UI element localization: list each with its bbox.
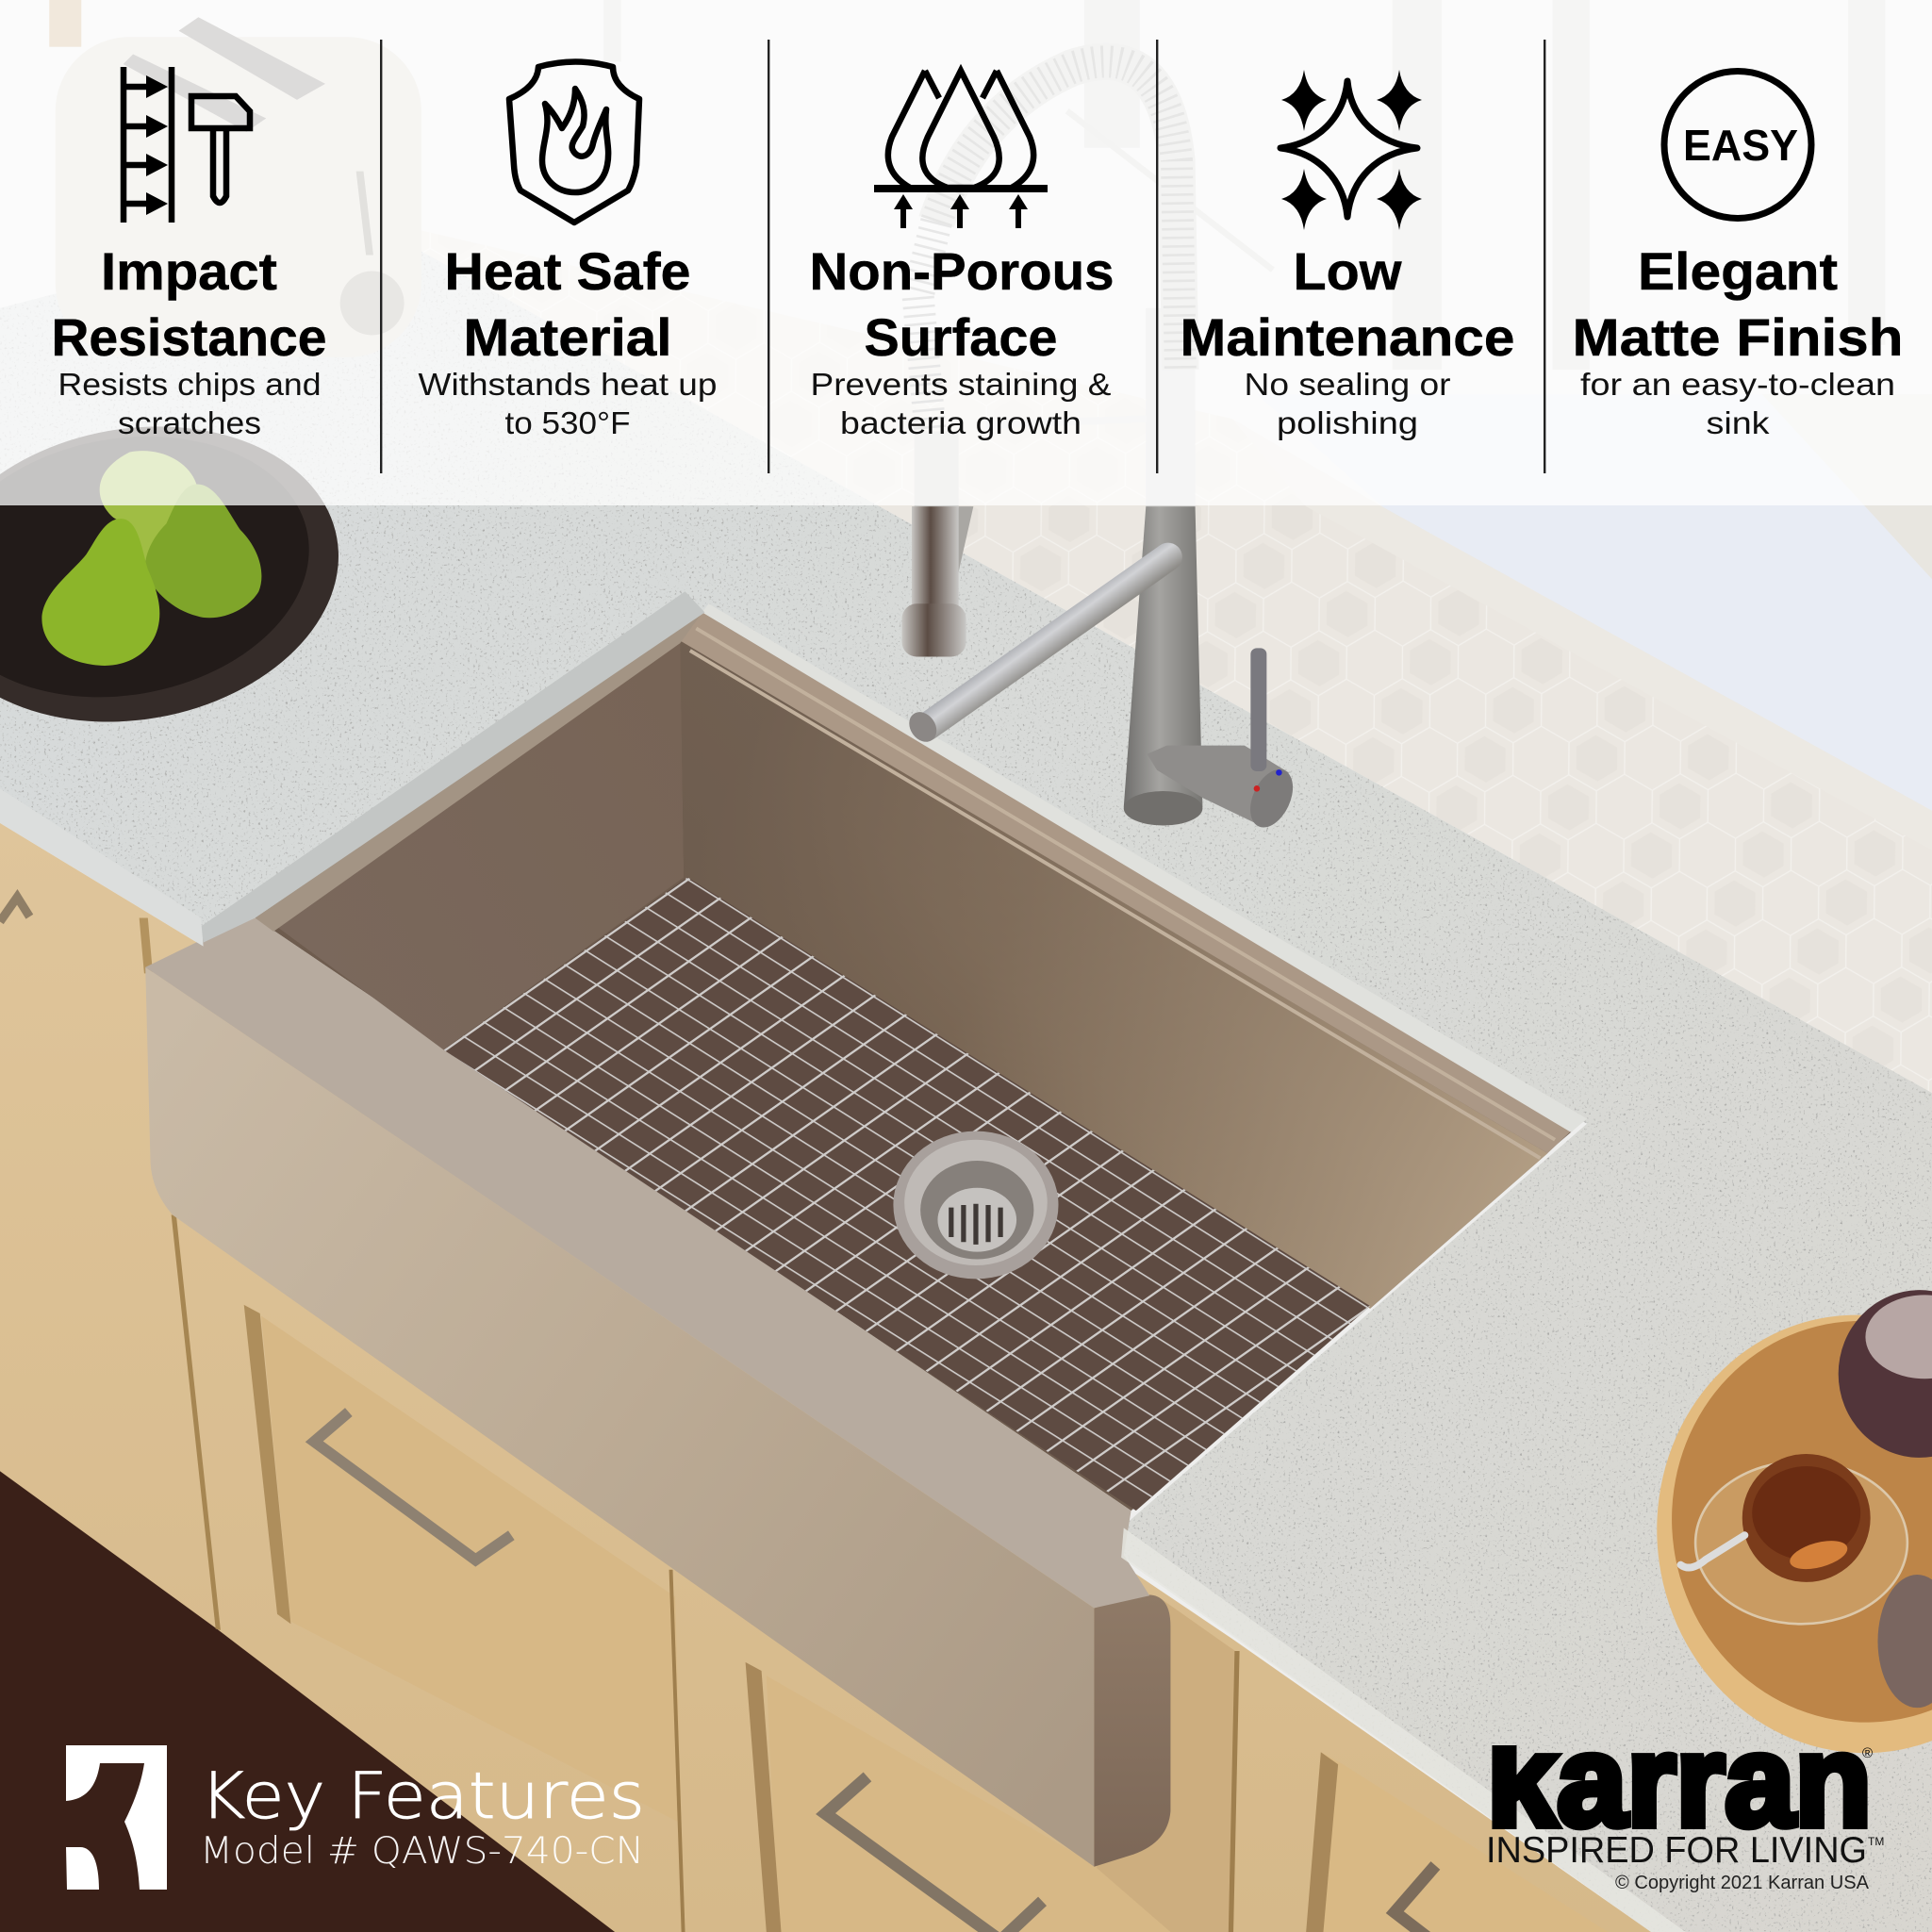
logo mark: white R: [66, 1745, 167, 1890]
stepped rim, left: [255, 612, 702, 932]
wire grid: [443, 877, 1370, 1511]
toaster: [49, 0, 421, 357]
upper faucet under the panel: [915, 308, 1196, 506]
left door edge, upper: [140, 918, 153, 973]
heading: Low: [1294, 241, 1402, 301]
description: [419, 368, 717, 441]
shaded wood beside the sink: [1097, 1597, 1237, 1932]
apron front: [145, 967, 1094, 1867]
description: Prevents staining &: [811, 368, 1111, 403]
sink left wall: [273, 643, 684, 1049]
model number: Model # QAWS-740-CN: [200, 1830, 644, 1873]
description: [1245, 368, 1450, 441]
handle: drawer two: [826, 1776, 1043, 1932]
front edge of the right counter: [1121, 1527, 1686, 1932]
sink base: [255, 612, 1572, 1511]
window diagonal mullion: [1067, 111, 1273, 270]
backsplash top band: [1232, 419, 1932, 850]
icon: water drops on surface: [874, 71, 1048, 228]
wordmark: karran: [1487, 1709, 1872, 1854]
left door edge, lower: [172, 1214, 221, 1630]
feature: low maintenance: [1181, 70, 1514, 441]
heading: Matte Finish: [1573, 307, 1903, 367]
heading: Surface: [864, 307, 1058, 367]
cabinets: [0, 823, 1651, 1932]
spoon: [1680, 1535, 1744, 1568]
stepped rim, rear: [680, 612, 1571, 1153]
floor: [0, 1471, 615, 1932]
teacup: [1742, 1454, 1871, 1582]
right centre door groove: [746, 1662, 781, 1932]
door split line: [669, 1570, 685, 1932]
lever housing: [1148, 746, 1289, 827]
apron top rim: [145, 918, 1149, 1608]
divider three: [1156, 40, 1158, 473]
drain: [893, 1131, 1059, 1279]
cabinet line right of the sink: [1229, 1651, 1240, 1932]
heading: Resistance: [51, 307, 326, 367]
front edge of the left counter: [0, 788, 204, 947]
handle: drawer three: [1395, 1865, 1435, 1932]
small pot: [1878, 1575, 1932, 1708]
sink rear wall: [680, 641, 1547, 1309]
window frame bars: [603, 0, 1885, 370]
plate with pears: [0, 395, 362, 753]
copyright: © Copyright 2021 Karran USA: [1615, 1873, 1870, 1893]
title: key features: Key Features: [200, 1759, 645, 1834]
description: for an easy-to-clean: [1580, 368, 1895, 403]
heading: [445, 241, 690, 367]
faucet stem: [1124, 506, 1202, 807]
feature: non-porous surface: [809, 71, 1115, 441]
hot and cold dots: [1254, 769, 1282, 792]
description: [811, 368, 1111, 441]
description: No sealing or: [1245, 368, 1450, 403]
registered mark: ®: [1862, 1745, 1873, 1761]
counter cut edge, left: [201, 591, 704, 943]
centre door groove: [244, 1305, 290, 1624]
description: Resists chips and: [58, 368, 321, 403]
heading: [1181, 241, 1514, 367]
heading: [809, 241, 1115, 367]
feature: impact resistance: [51, 67, 326, 441]
window sill: [1257, 394, 1932, 811]
icon: easy badge: EASY: [1683, 121, 1798, 170]
spout arm: [927, 557, 1168, 727]
description: scratches: [118, 406, 261, 441]
counter cut edge, rear: [702, 603, 1587, 1132]
sink: [145, 612, 1572, 1867]
sprayer body: [902, 506, 973, 657]
faucet: [902, 61, 1301, 834]
icon: wall and hammer: [124, 67, 250, 223]
heading: Elegant: [1638, 241, 1838, 301]
icon: sparkle: [1280, 70, 1422, 230]
brand logo: karran: [1490, 1745, 1884, 1892]
cabinet base wood: [0, 823, 1651, 1932]
hexagon tile backsplash: [357, 216, 1932, 1093]
description: Withstands heat up: [419, 368, 717, 403]
divider one: [380, 40, 382, 473]
centre door panel: [261, 1316, 682, 1824]
icon: easy badge: [1664, 72, 1811, 219]
teapot: [1839, 1290, 1932, 1458]
heading: Maintenance: [1181, 307, 1514, 367]
heading: [51, 241, 326, 367]
handle: left upper: [0, 897, 29, 921]
description: sink: [1707, 406, 1770, 441]
tagline: INSPIRED FOR LIVING: [1486, 1830, 1867, 1871]
apron side: [1094, 1594, 1170, 1867]
pears: [41, 451, 261, 666]
lever: [1250, 648, 1266, 771]
heading: Non-Porous: [809, 241, 1115, 301]
description: [58, 368, 321, 441]
right door groove: [1306, 1752, 1338, 1932]
sink floor: [443, 877, 1370, 1511]
serving tray with teaware: [1628, 1289, 1932, 1779]
divider four: [1544, 40, 1545, 473]
saucer: [1695, 1461, 1907, 1624]
frosted feature panel: [0, 0, 1932, 505]
spring hose: [936, 61, 1181, 370]
right centre door panel: [767, 1676, 1214, 1932]
description: [1580, 368, 1895, 441]
heading: [1573, 241, 1903, 367]
feature: heat safe material: [419, 62, 717, 441]
heading: Material: [464, 307, 671, 367]
description: bacteria growth: [840, 406, 1082, 441]
heading: Heat Safe: [445, 241, 690, 301]
handle: drawer one: [314, 1412, 511, 1560]
trademark: TM: [1868, 1835, 1884, 1848]
description: to 530°F: [505, 406, 630, 441]
right door panel: [1306, 1752, 1608, 1932]
divider two: [768, 40, 769, 473]
icon: flame shield: [509, 62, 639, 223]
heading: Impact: [101, 241, 277, 301]
feature: elegant matte finish: [1573, 72, 1903, 441]
description: polishing: [1277, 406, 1418, 441]
